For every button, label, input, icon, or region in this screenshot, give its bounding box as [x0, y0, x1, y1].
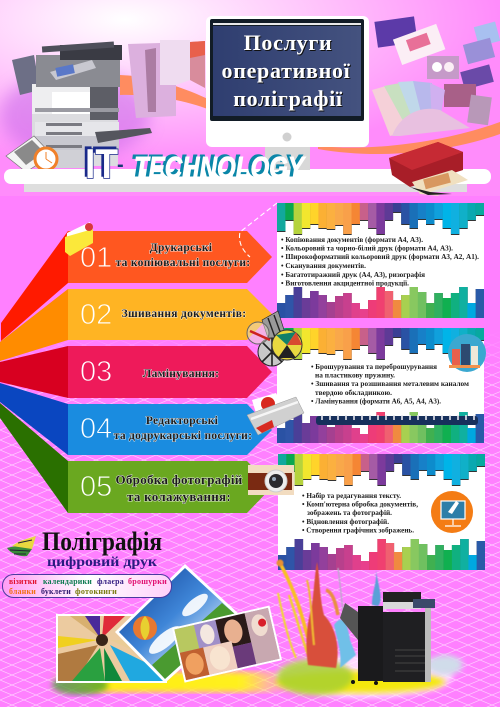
icon: colour fan [372, 81, 470, 136]
arrow 2: Зшивання документів: [122, 308, 246, 320]
icon: plastic spiral binding [316, 415, 478, 425]
product tags pill: буклети [41, 587, 71, 596]
icon: book stack [128, 40, 205, 118]
heading: polygraphy [42, 527, 162, 570]
yellow ground glow [50, 654, 463, 698]
arrow 4: Редакторські [146, 415, 219, 427]
title: поліграфії [233, 86, 343, 111]
arrow 4 [0, 383, 272, 455]
header illustration band [0, 16, 500, 160]
icon: business cards [374, 16, 500, 125]
list: printing services: • Виготовлення акцидентної продукції. [281, 278, 409, 288]
list: binding: • Брошурування та переброшурування [311, 362, 437, 371]
arrow 1 [1, 231, 272, 341]
icon: binding samples circles [247, 311, 302, 366]
heading: polygraphy: цифровий друк [47, 555, 158, 570]
list: editing: зображень та фотографій. [307, 508, 392, 517]
arrow 4: 04 [80, 413, 112, 445]
list: editing: • Створення графічних зображень. [302, 526, 414, 534]
icon: red printer [389, 142, 468, 196]
product tags pill: фотокниги [75, 587, 117, 596]
list: binding: • Ламінування (формати А6, А5, А4, А3). [311, 396, 441, 406]
title [222, 30, 351, 111]
logo: IT-Technology: - [117, 154, 124, 176]
list: printing services: • Широкоформатний кольоровий друк (формати А3, А2, А1). [281, 252, 479, 261]
title: оперативної [222, 58, 351, 83]
product tags pill: флаєра [97, 577, 124, 586]
arrow 1: та копіювальні послуги: [116, 257, 250, 269]
icon: black production printer [340, 592, 435, 685]
list: binding [311, 362, 469, 406]
arrow 5 [0, 403, 272, 513]
title: Послуги [244, 30, 332, 55]
list: binding: • Зшивання та розшивання металевим каналом [311, 379, 469, 388]
heading: polygraphy: Поліграфія [42, 527, 162, 556]
arrow 3 [0, 346, 272, 398]
panel: printing services [277, 203, 484, 318]
logo: IT-Technology: TECHNOLOGY [134, 150, 307, 185]
arrow 4: та додрукарські послуги: [114, 430, 252, 442]
panel: binding and lamination [277, 328, 486, 443]
arrow 5: та колажування: [127, 489, 231, 504]
product tags pill: календарики [43, 577, 92, 586]
icon: office copier [12, 41, 152, 168]
product tags pill [2, 574, 172, 598]
product tags pill: бланки [9, 587, 36, 596]
list: editing: • Відновлення фотографій. [302, 517, 389, 526]
list: printing services: • Кольоровий та чорно-білий друк (формати А4, А3). [281, 244, 453, 252]
list: printing services: • Копіювання документів (формати А4, А3). [281, 235, 423, 244]
arrow 5: Обробка фотографій [115, 472, 243, 487]
icon: folder [65, 222, 93, 256]
panel: editing and photos [278, 454, 485, 570]
photo: balloon [115, 564, 240, 683]
list: editing: • Комп'ютерна обробка документів, [302, 500, 418, 508]
paint splash [276, 560, 381, 668]
logo: IT-Technology: IT [85, 140, 118, 187]
list: editing: • Набір та редагування тексту. [302, 491, 401, 500]
shelf [4, 169, 491, 192]
icon: camera [248, 465, 294, 495]
arrow 3: Ламінування: [143, 368, 219, 380]
logo: IT-Technology [85, 140, 307, 187]
list: printing services: • Сканування документів. [281, 261, 366, 270]
arrow 1: 01 [80, 242, 112, 274]
arrow 5: 05 [80, 471, 112, 503]
product tags pill: брошурки [128, 577, 167, 586]
icon: papers and clock [6, 136, 57, 172]
arrow 1: Друкарські [150, 242, 213, 254]
icon: laminator [247, 393, 304, 435]
monitor [206, 16, 369, 170]
arrow 2 [0, 289, 272, 361]
icon: books circle [448, 334, 486, 372]
orange swoosh [120, 75, 500, 154]
icon: monitor circle [431, 491, 473, 533]
list: printing services: • Багатотиражний друк (А4, А3), ризографія [281, 270, 425, 279]
butterfly [7, 536, 36, 556]
list: editing [302, 491, 418, 534]
arrow 3: 03 [80, 356, 112, 388]
dashed connector [239, 203, 277, 257]
list: binding: твердою обкладинкою. [315, 388, 392, 397]
photo: coloured pencils [56, 614, 167, 683]
list: binding: на пластикову пружину. [315, 370, 395, 380]
list: printing services [281, 235, 479, 288]
product tags pill: візитки [9, 577, 37, 586]
arrow 2: 02 [80, 299, 112, 331]
photo: face collage [172, 606, 282, 683]
